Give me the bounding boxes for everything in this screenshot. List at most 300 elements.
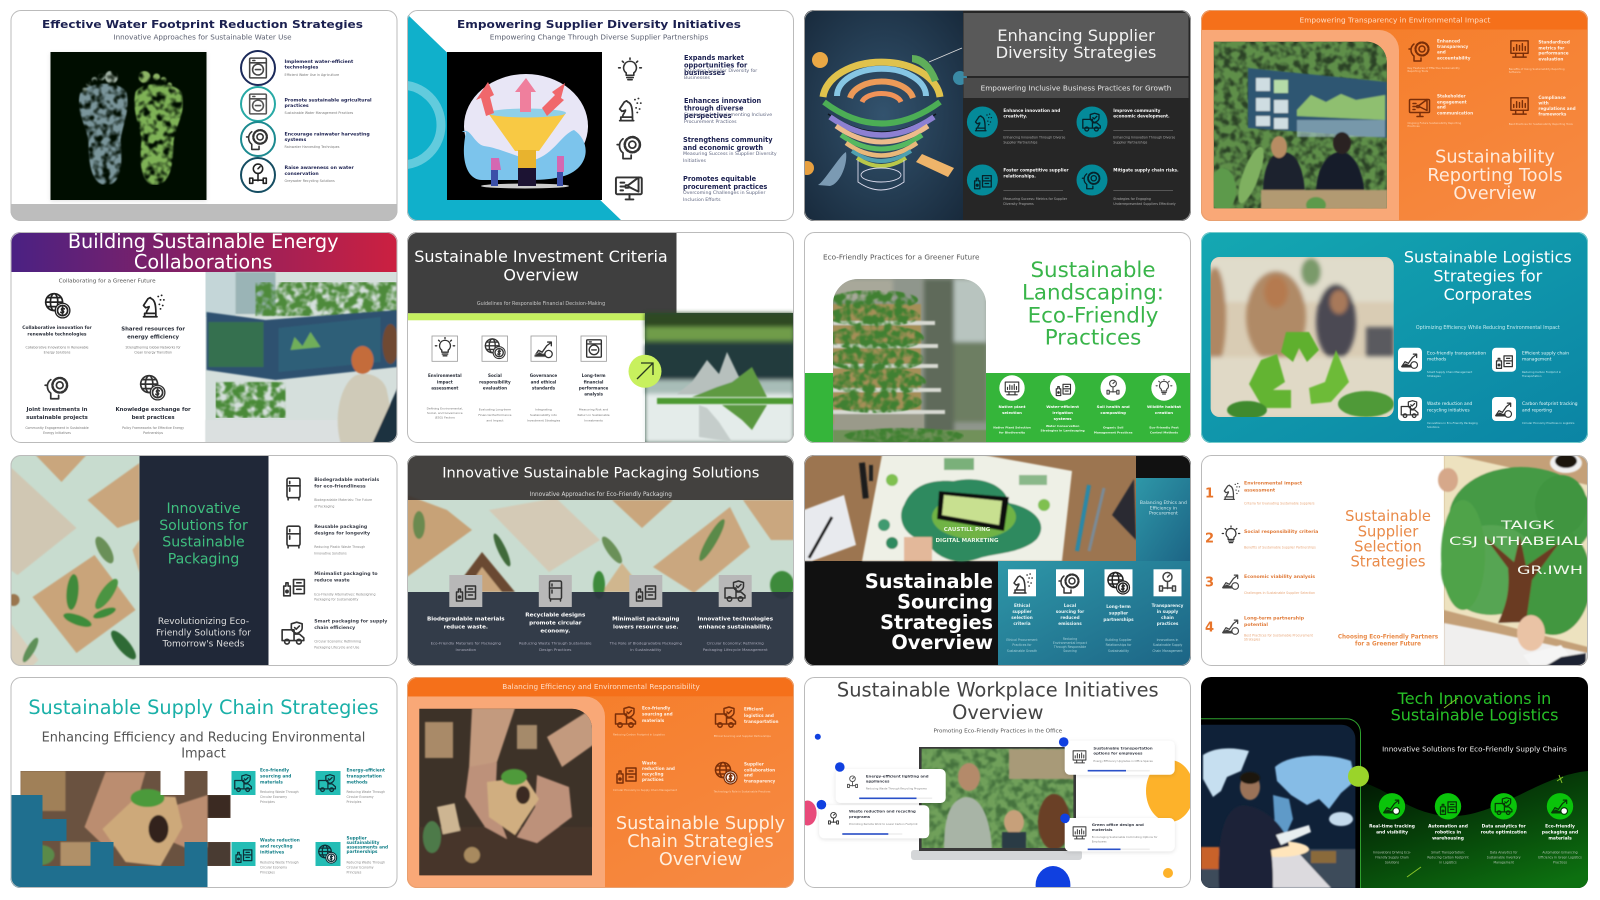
lettering in painting: CSJ UTHABEIAL — [1449, 534, 1584, 548]
item descriptions: Ethical Sourcing and Supplier Partnerships — [714, 734, 771, 738]
item descriptions: Principles — [260, 870, 275, 874]
item headings: Eco-friendly — [642, 706, 671, 711]
icon — [1082, 173, 1099, 189]
item descriptions: Water Conservation — [1046, 424, 1079, 428]
subtitle: Optimizing Efficiency While Reducing Environmental Impact — [1416, 325, 1560, 331]
decorative blobs — [799, 734, 1194, 900]
list: strategies: Rainwater Harvesting Techniques — [284, 145, 340, 149]
title: Overview — [1453, 184, 1537, 204]
item headings: Mitigate supply chain risks. — [1113, 168, 1179, 173]
item descriptions: Evaluating Long-term — [479, 407, 511, 411]
item headings: recycling initiatives — [1427, 407, 1470, 413]
panel: Sustainable Supply Chain Strategies Overview — [407, 677, 794, 888]
title: Sustainable — [162, 535, 245, 551]
item headings: management — [1522, 357, 1552, 363]
item headings: Carbon footprint tracking — [1522, 401, 1578, 407]
item headings: Long-term — [1106, 604, 1131, 609]
panel: Sustainable Investment Criteria Overview — [407, 232, 794, 443]
item headings: composting — [1100, 410, 1126, 415]
item headings: sourcing and — [642, 712, 673, 717]
item descriptions: Supplier Partnerships — [1113, 141, 1148, 145]
subtitle: Empowering Transparency in Environmental Impact — [1300, 16, 1491, 24]
icon — [976, 114, 991, 131]
icons — [1409, 41, 1528, 116]
title: Chain Strategies — [627, 832, 774, 852]
list text: and economic growth — [683, 144, 763, 152]
magazine lettering: DIGITAL MARKETING — [935, 538, 999, 544]
numbers: 3 — [1205, 576, 1214, 591]
item descriptions: Energy Initiatives — [43, 431, 71, 435]
item descriptions: Principles — [260, 800, 275, 804]
items: Compliance — [1538, 95, 1566, 100]
panel: Sustainability Reporting Tools Overview: Software — [1509, 70, 1521, 74]
item descriptions: Design Practices — [539, 647, 571, 652]
panel: Empowering Supplier Diversity Initiatives — [407, 10, 794, 221]
item headings: route optimization — [1481, 829, 1527, 835]
panel: Sustainability Reporting Tools Overview: Key Features of Effective Sustainability — [1408, 66, 1460, 70]
card: energy-efficient lighting: Reducing Waste Through Recycling Programs — [866, 787, 927, 791]
photo: hands with kraft box — [419, 708, 593, 877]
photo: recycle symbol in office — [1204, 257, 1395, 419]
item descriptions: Clean Energy Transition — [134, 350, 172, 354]
panel: Sustainable Logistics Strategies for Corporates — [1201, 232, 1588, 443]
item headings: creativity. — [1003, 114, 1028, 119]
item headings: responsibility — [479, 379, 511, 384]
icons — [1008, 569, 1182, 596]
item texts: technologies — [284, 65, 319, 71]
panel: Empowering Supplier Diversity Initiatives: Strategies for Implementing Inclusive — [684, 112, 772, 118]
item headings: transparency — [744, 778, 776, 783]
item headings: Native plant — [999, 404, 1026, 409]
icon: bulb — [619, 58, 641, 80]
icon: monitor megaphone — [616, 177, 642, 199]
item descriptions: Biodegradable Materials: The Future — [314, 498, 372, 502]
item descriptions: Innovations in Eco-Friendly Packaging — [1427, 421, 1478, 425]
item descriptions: Reducing — [1063, 637, 1077, 641]
item descriptions: Best Practices for Sustainable Procurement — [1244, 634, 1314, 638]
item descriptions: Reducing Carbon Footprint in — [1522, 370, 1562, 374]
title: Overview — [503, 266, 579, 285]
item headings: Eco-friendly — [260, 768, 289, 774]
item descriptions: Control Methods — [1150, 430, 1178, 434]
item headings: Smart packaging for supply — [314, 618, 387, 624]
panel: Empowering Supplier Diversity Initiatives: Procurement Practices — [684, 119, 737, 125]
item descriptions: Financial Performance — [478, 413, 512, 417]
subtitle: Balancing Ethics and — [1140, 500, 1187, 506]
item headings: Minimalist packaging to — [314, 571, 378, 577]
item headings: assessment — [1244, 487, 1276, 493]
item headings: and ethical — [531, 379, 557, 384]
item texts: systems — [284, 137, 306, 143]
subtitle: Efficiency in — [1150, 505, 1177, 511]
grid: four benefits — [967, 106, 1179, 206]
items: Stakeholder — [1437, 94, 1466, 99]
laptop with photo — [911, 747, 1082, 860]
panel: Innovative Sustainable Packaging Solutions — [407, 455, 794, 666]
items: frameworks — [1538, 111, 1567, 116]
item headings: Soil health and — [1097, 404, 1130, 409]
item headings: and — [744, 773, 753, 778]
item descriptions: Circular Economy — [260, 865, 287, 869]
item descriptions: Criteria for Evaluating Sustainable Suppliers — [1244, 501, 1315, 505]
title: Overview — [952, 701, 1044, 724]
list text: Promotes equitable — [683, 175, 757, 183]
item headings: Reusable packaging — [314, 524, 367, 530]
photo: chart in water — [645, 313, 794, 443]
item headings: recycling — [642, 771, 663, 776]
photo: hands holding box — [20, 771, 230, 866]
card: energy-efficient lighting: appliances — [866, 779, 890, 784]
item headings: Local — [1064, 603, 1077, 608]
title: Building Sustainable Energy — [68, 230, 339, 253]
photo: sustainability dashboard — [1210, 41, 1388, 213]
title: Collaborations — [134, 250, 272, 273]
title: Eco-Friendly — [1028, 303, 1159, 328]
item descriptions: Sourcing — [1063, 649, 1077, 653]
subtitle: Tomorrow's Needs — [162, 640, 245, 650]
icons — [45, 294, 165, 400]
item descriptions: Sustainability — [1108, 649, 1129, 653]
item descriptions: Packaging Lifecycle and Use — [314, 646, 359, 650]
item descriptions: Relationships for — [1106, 643, 1132, 647]
item headings: practices — [642, 777, 664, 782]
item headings: reduced — [1060, 615, 1080, 620]
title: Sustainable Supply — [616, 814, 785, 834]
item descriptions: Circular Economy: Rethinking — [314, 640, 361, 644]
card: waste reduction: programs — [849, 814, 871, 819]
title: Strategies for — [1433, 266, 1543, 285]
panel: Sustainable Workplace Initiatives Overview — [799, 677, 1194, 900]
item headings: sourcing and — [260, 774, 291, 780]
item descriptions: Circular Economy: Rethinking — [707, 640, 764, 645]
panel: Sustainability Reporting Tools Overview — [1201, 10, 1588, 221]
card: waste reduction: Promoting Remote Work to Lower Carbon Footprint — [849, 822, 918, 826]
subtitle: Eco-Friendly Practices for a Greener Future — [823, 253, 980, 262]
items: transparency — [1437, 44, 1469, 49]
item descriptions: Solutions — [1427, 425, 1440, 429]
panel: Sustainability Reporting Tools Overview: Best Practices for Sustainability Reporting Tools — [1509, 122, 1573, 126]
item headings: Automation and — [1428, 823, 1468, 829]
border line — [1201, 719, 1360, 888]
icon — [1083, 113, 1100, 131]
icons — [616, 707, 737, 784]
item headings: promote circular — [529, 621, 582, 627]
item headings: selection — [1002, 410, 1022, 415]
lettering in painting: GR.IWH — [1517, 563, 1583, 577]
item descriptions: Reducing Carbon Footprint in Logistics — [613, 733, 665, 737]
item headings: packaging and — [1542, 829, 1578, 835]
panel: Sustainability Reporting Tools Overview: Practices — [1408, 124, 1420, 128]
panel: Sustainability Reporting Tools Overview: Benefits of Using Sustainability Reporting — [1509, 67, 1565, 71]
item descriptions: Measuring Success: Metrics for Supplier — [1003, 197, 1068, 201]
item descriptions: Investment Strategies — [527, 419, 561, 423]
list text: Strengthens community — [683, 136, 773, 144]
item descriptions: Sustainability into — [530, 413, 557, 417]
list: strategies: Sustainable Water Management Practices — [284, 111, 354, 115]
item descriptions: Circular Economy — [346, 795, 374, 799]
item headings: Transparency — [1152, 603, 1184, 608]
item headings: sourcing for — [1056, 609, 1085, 614]
item headings: transportation — [346, 774, 382, 780]
icon: valve — [250, 164, 266, 183]
item headings: in supply — [1157, 609, 1179, 614]
panel: Tech Innovations in Sustainable Logistics — [1201, 677, 1588, 888]
item headings: assessments and — [346, 844, 388, 850]
title: Sustainable Logistics — [1404, 247, 1572, 266]
magazine lettering: CAUSTILL PING — [944, 527, 991, 533]
item headings: economic development. — [1113, 114, 1170, 119]
list: strategies — [241, 51, 372, 192]
panel: Building Sustainable Energy Collaborations: sustainable projects — [26, 415, 88, 421]
item descriptions: Automation Enhancing — [1542, 851, 1578, 855]
subtitle: Promoting Eco-Friendly Practices in the Office — [933, 728, 1063, 734]
panel: Sustainable Landscaping — [804, 232, 1191, 444]
title: Enhancing Supplier — [997, 26, 1155, 45]
item descriptions: Innovations Driving Eco- — [1373, 851, 1411, 855]
panel: Sustainability Reporting Tools Overview: Ongoing Future Sustainability Reporting — [1408, 121, 1462, 125]
photo: collaboration wall — [206, 272, 398, 443]
item headings: Energy-efficient — [346, 768, 385, 774]
title: Innovative — [166, 501, 241, 517]
item headings: practices — [1157, 621, 1179, 626]
item headings: Eco-friendly — [1545, 823, 1575, 829]
item headings: materials — [260, 780, 283, 786]
item headings: and reporting — [1522, 407, 1552, 413]
subtitle: Balancing Efficiency and Environmental Responsibility — [502, 682, 700, 691]
card: energy-efficient lighting: Energy-efficient lighting and — [866, 773, 929, 778]
list text: perspectives — [684, 112, 732, 120]
items: accountability — [1437, 55, 1471, 60]
item headings: selection — [1011, 615, 1033, 620]
item headings: emissions — [1058, 621, 1082, 626]
item descriptions: Solutions — [1385, 860, 1399, 864]
item descriptions: Enhancing Innovation Through Diverse — [1113, 136, 1175, 140]
items: evaluation — [1538, 56, 1563, 61]
item headings: chain efficiency — [314, 625, 355, 631]
item headings: reduce waste — [314, 578, 350, 584]
title: Sustainable Supply Chain Strategies — [28, 696, 379, 719]
arrow badge — [628, 355, 662, 388]
item descriptions: Sustainable Growth — [1007, 649, 1037, 653]
list text: procurement practices — [683, 183, 767, 191]
item headings: analysis — [584, 392, 604, 397]
title: Sustainability — [1435, 148, 1555, 168]
item descriptions: Innovations in — [1157, 638, 1178, 642]
item descriptions: Eco-Friendly Alternatives: Redesigning — [314, 593, 375, 597]
title: Overview — [891, 631, 993, 654]
item headings: Water-efficient — [1046, 404, 1079, 409]
item headings: Improve community — [1113, 108, 1161, 113]
list text: businesses — [684, 69, 725, 77]
card: sustainable transportation: options for employees — [1093, 751, 1143, 756]
item descriptions: Organic Soil — [1103, 425, 1123, 429]
photo: painted tree — [1438, 453, 1593, 666]
panel: Empowering Supplier Diversity Initiatives: Initiatives — [683, 158, 706, 164]
panel: Building Sustainable Energy Collaborations: Shared resources for — [121, 326, 185, 332]
title: Solutions for — [159, 518, 248, 534]
subtitle: Collaborating for a Greener Future — [59, 279, 156, 285]
item headings: Economic viability analysis — [1244, 574, 1315, 580]
items: Enhanced — [1437, 38, 1460, 43]
item descriptions: Eco-Friendly Pest — [1149, 425, 1179, 429]
item descriptions: Innovation — [455, 647, 477, 652]
card: green office design: Green office design and — [1092, 822, 1144, 827]
item headings: logistics and — [744, 713, 774, 718]
item descriptions: Reducing Waste Through — [260, 790, 299, 794]
subtitle: Enhancing Efficiency and Reducing Environmental — [42, 731, 365, 746]
item headings: irrigation — [1052, 410, 1073, 415]
item texts: Raise awareness on water — [284, 165, 354, 171]
item headings: Long-term — [582, 373, 606, 378]
photo: kraft boxes — [8, 455, 140, 666]
item descriptions: Reducing Waste Through — [260, 860, 299, 864]
title: Diversity Strategies — [996, 43, 1156, 62]
list: strategies: Greywater Recycling Solutions — [284, 179, 335, 183]
title: Sustainable Workplace Initiatives — [837, 679, 1159, 702]
subtitle: Procurement — [1149, 510, 1178, 516]
item descriptions: Policy Frameworks for Effective Energy — [122, 426, 184, 430]
item descriptions: Efficiency in Green Logistics — [1538, 855, 1582, 859]
subtitle: Revolutionizing Eco- — [158, 617, 249, 627]
item headings: evaluation — [483, 386, 507, 391]
item descriptions: Smart Transportation: — [1431, 851, 1465, 855]
image: footprints — [50, 52, 206, 200]
card: sustainable transportation: Sustainable transportation — [1093, 745, 1153, 750]
numbers: 4 — [1205, 621, 1214, 636]
item descriptions: Diversity Programs — [1003, 202, 1034, 206]
item headings: enhance sustainability. — [699, 625, 772, 631]
item headings: robotics in — [1435, 829, 1461, 835]
lime circle — [1348, 766, 1369, 787]
card: sustainable transportation: Energy Efficiency Upgrades in Office Spaces — [1093, 759, 1153, 763]
item texts: Encourage rainwater harvesting — [284, 131, 370, 137]
icon: gear head — [247, 130, 267, 149]
items: metrics for — [1538, 45, 1565, 50]
list text: through diverse — [684, 104, 744, 112]
item descriptions: Practices for — [1012, 643, 1032, 647]
item texts: practices — [284, 103, 309, 109]
stepped accent — [10, 795, 208, 888]
item headings: initiatives — [260, 850, 285, 856]
lettering in painting: TAIGK — [1499, 518, 1555, 532]
panel: Sustainable Sourcing Strategies Overview — [804, 455, 1191, 666]
item headings: performance — [579, 386, 609, 391]
item descriptions: Principles — [346, 800, 362, 804]
item headings: methods — [1427, 357, 1447, 363]
item headings: financial — [584, 379, 604, 384]
item descriptions: Through Responsible — [1053, 645, 1086, 649]
title: Effective Water Footprint Reduction Strategies — [42, 18, 363, 31]
panel: Building Sustainable Energy Collaborations: best practices — [132, 415, 175, 421]
illustration: funnel and arrows — [447, 52, 602, 200]
item headings: reduce waste. — [444, 625, 488, 631]
item descriptions: (ESG) Factors — [435, 416, 455, 420]
title: Strategies — [1350, 554, 1426, 571]
card: green office design: Encouraging Sustainable Commuting Options for — [1092, 835, 1158, 839]
panel: Building Sustainable Energy Collaborations: energy efficiency — [127, 334, 180, 340]
item headings: Efficient supply chain — [1522, 350, 1569, 356]
item headings: Waste reduction — [260, 838, 300, 844]
item headings: Biodegradable materials — [314, 477, 379, 483]
item descriptions: Reducing Plastic Waste Through — [314, 545, 365, 549]
subtitle: Innovative Approaches for Eco-Friendly Packaging — [530, 492, 672, 498]
item headings: Collaborative innovation for — [22, 325, 93, 331]
item descriptions: in Logistics — [1439, 860, 1457, 864]
panel: Empowering Supplier Diversity Initiatives: Businesses — [684, 75, 711, 81]
item descriptions: Practices — [1553, 860, 1567, 864]
card: waste reduction: Waste reduction and recycling — [849, 809, 916, 814]
item headings: Long-term partnership — [1244, 615, 1305, 621]
subtitle: Innovative Approaches for Sustainable Water Use — [113, 32, 292, 42]
item descriptions: Circular Economy Practices in Logistics — [1522, 421, 1575, 425]
card: energy-efficient lighting — [835, 762, 946, 803]
items: with — [1538, 101, 1549, 106]
item texts: conservation — [284, 171, 319, 177]
item headings: Enhance innovation and — [1003, 108, 1060, 113]
title: Sustainable Logistics — [1391, 706, 1558, 725]
item headings: Recyclable designs — [525, 613, 586, 619]
item descriptions: and Impact — [486, 419, 504, 423]
list text: Enhances innovation — [684, 97, 762, 105]
item descriptions: Data Analytics for — [1490, 851, 1518, 855]
item descriptions: Environmental Impact — [1053, 641, 1088, 645]
item descriptions: Collaborative Innovations in Renewable — [25, 345, 89, 349]
photo: kraft boxes background — [407, 455, 794, 666]
panel: Sustainable Supplier Selection Strategies — [1201, 453, 1593, 666]
item headings: collaboration — [744, 767, 775, 772]
item headings: Wildlife habitat — [1147, 404, 1181, 409]
item descriptions: Innovative Solutions — [314, 551, 347, 555]
icons — [232, 771, 340, 866]
item descriptions: Technology's Role in Sustainable Practices — [713, 790, 771, 794]
item headings: Social responsibility criteria — [1244, 529, 1318, 535]
item descriptions: Return in Sustainable — [578, 413, 610, 417]
item descriptions: Packaging for Sustainability — [314, 598, 358, 602]
icons — [432, 336, 606, 361]
item headings: Efficient — [744, 707, 763, 712]
title: Sourcing — [897, 590, 993, 614]
item descriptions: Strategies — [1244, 638, 1261, 642]
item headings: sustainability — [346, 840, 380, 846]
item descriptions: Strengthening Global Networks for — [125, 345, 181, 349]
item headings: relationships. — [1003, 174, 1036, 179]
item headings: Foster competitive supplier — [1003, 168, 1069, 173]
item headings: Minimalist packaging — [612, 617, 679, 623]
item descriptions: of Packaging — [314, 504, 334, 508]
item descriptions: Strategies — [1427, 374, 1441, 378]
item descriptions: Management — [1494, 860, 1515, 864]
item texts: Implement water-efficient — [284, 59, 354, 65]
item headings: Ethical — [1014, 603, 1031, 608]
item descriptions: Ethical Procurement — [1006, 638, 1038, 642]
icon: washer 2 — [250, 94, 266, 114]
item headings: Real-time tracking — [1369, 823, 1415, 829]
list text: Expands market — [684, 54, 744, 62]
subtitle: Impact — [181, 747, 226, 762]
title: Innovative Sustainable Packaging Solutions — [442, 465, 759, 482]
item descriptions: Principles — [346, 870, 362, 874]
item headings: Innovative technologies — [697, 617, 774, 623]
title: Practices — [1045, 326, 1141, 351]
item descriptions: Transportation — [1521, 374, 1542, 378]
icon: bulb gear — [617, 137, 640, 159]
title: Strategies — [880, 611, 993, 634]
item headings: supplier — [1012, 609, 1033, 614]
title: Corporates — [1444, 285, 1532, 304]
panel: Empowering Supplier Diversity Initiatives: Measuring Success in Supplier Diversity — [683, 151, 777, 157]
title: Sustainable — [1030, 258, 1156, 283]
icon — [975, 176, 991, 189]
